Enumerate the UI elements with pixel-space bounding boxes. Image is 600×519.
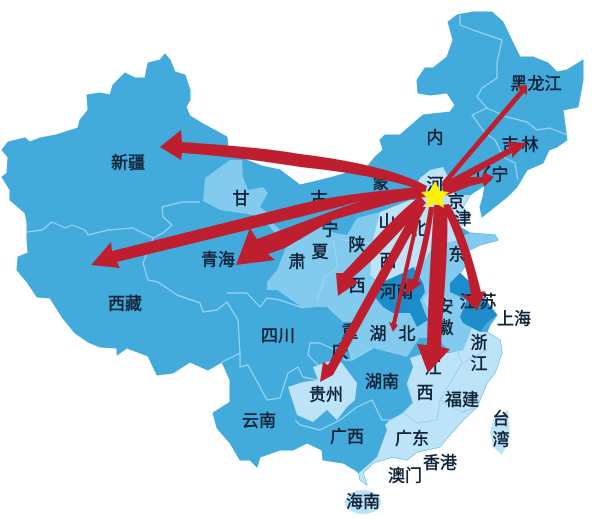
province labels: 内 [426,128,444,148]
province labels: 山 [378,212,396,232]
province labels: 甘 [232,190,250,208]
province labels: 浙 [470,334,488,352]
province labels: 林 [522,136,538,154]
province labels: 西 [416,384,434,402]
province labels: 台 [492,410,510,428]
province borders [27,15,567,430]
arrow to Tibet [91,186,427,268]
region: southeast provinces [359,328,502,485]
province labels: 河 [380,282,396,302]
province labels: 西 [348,276,366,296]
arrow to Hubei [389,208,422,332]
province labels: 海南 [346,492,380,512]
province labels: 湾 [492,430,510,450]
province labels: 广东 [395,430,429,448]
province labels: 蒙 [372,174,390,192]
province labels: 香港 [423,454,457,472]
province labels: 津 [454,210,472,228]
province labels: 澳门 [388,466,422,486]
province labels [108,74,562,512]
arrow to Xinjiang [160,130,427,191]
arrow to Jiangxi [417,205,450,373]
province labels: 宁 [322,220,338,240]
province labels: 安 [436,298,454,316]
arrows radiating from the star [91,85,527,382]
province labels: 徽 [436,318,454,338]
region: Anhui north [423,288,450,312]
province labels: 庆 [332,342,348,362]
region: Shanxi [370,200,418,283]
province labels: 河 [426,176,444,194]
province labels: 吉 [502,136,518,154]
arrow to Henan [405,207,434,296]
arrow to Liaoning [442,172,494,196]
province labels: 西藏 [108,294,142,314]
province labels: 肃 [288,252,306,272]
region: Taiwan [490,410,510,455]
province labels: 东 [448,246,466,264]
province labels: 福建 [445,390,479,410]
icon: yellow star [421,181,449,208]
region: Jiangsu [450,273,497,332]
province labels: 江 [460,292,476,312]
province labels: 江 [424,358,442,378]
arrow to Qinghai [236,190,426,265]
province labels: 黑龙江 [510,74,562,94]
region: Guizhou [288,360,357,422]
region: Hainan [345,490,381,514]
province labels: 重 [342,322,358,342]
province labels: 上海 [497,310,531,328]
province labels: 苏 [480,292,496,312]
province labels: 贵州 [309,386,343,404]
province labels: 西 [380,252,396,270]
province labels: 北 [410,220,426,238]
province labels: 湖南 [365,372,399,392]
region: Hebei, Beijing, Tianjin [405,167,470,267]
province labels: 北 [398,324,416,344]
region: Henan [375,267,428,327]
province labels: 陕 [348,236,366,254]
province labels: 湖 [370,324,386,344]
province labels: 辽 [474,164,492,184]
province labels: 夏 [312,242,328,262]
province labels: 江 [470,354,488,374]
region: Gansu, Ningxia, Shaanxi [203,160,380,322]
province labels: 宁 [492,166,508,184]
arrow to Jilin [441,142,527,191]
province labels: 新疆 [111,154,145,172]
province labels: 云南 [242,412,276,430]
region: central lowlands base [347,233,498,360]
province labels: 古 [310,190,328,208]
province labels: 四川 [261,326,295,346]
arrow to Shaanxi [336,196,426,296]
province labels: 南 [396,282,414,302]
province labels: 广西 [330,428,364,446]
province labels: 京 [448,192,464,212]
arrow to Jiangsu [442,204,485,311]
arrow to Heilongjiang [442,85,527,186]
province labels: 青海 [201,250,235,270]
arrow to Guizhou [320,206,426,382]
